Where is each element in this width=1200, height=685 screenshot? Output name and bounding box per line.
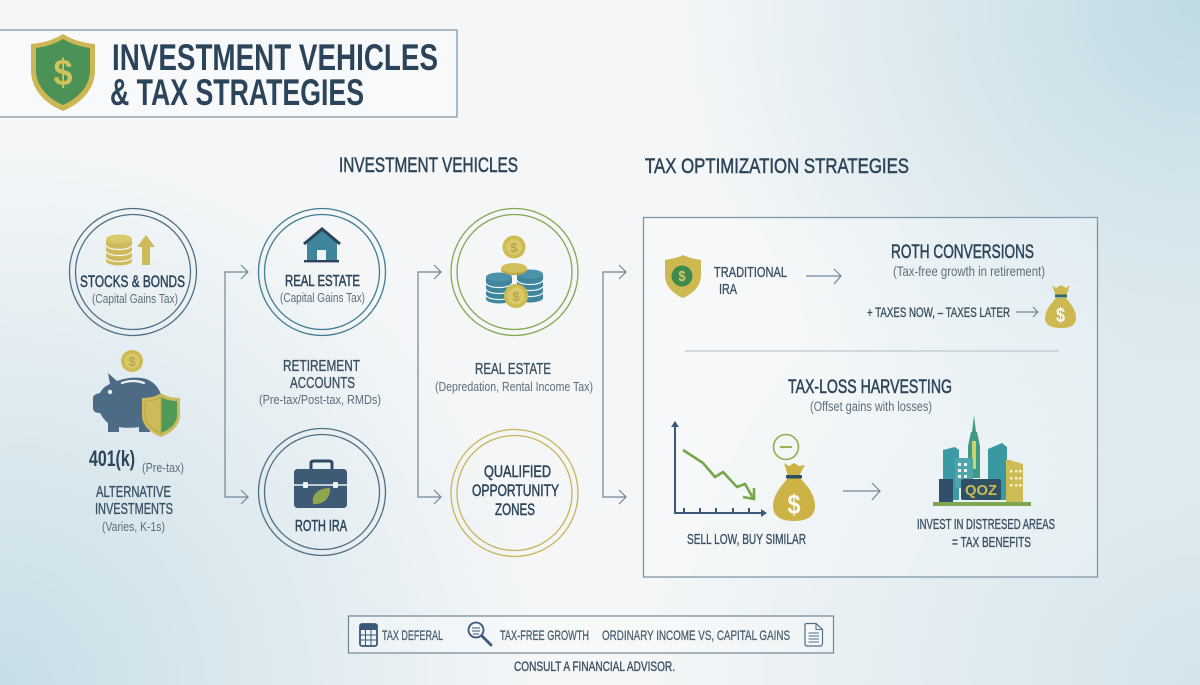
chart: falling line [671,421,767,517]
text: alternative investments: ALTERNATIVE [96,484,171,501]
icon: coin stack and arrow [106,234,155,266]
icon: calculator [360,624,377,646]
arrow: to money bag [1016,307,1038,317]
title banner [0,30,457,117]
icon: loss money bag [773,463,815,521]
text: tax-free growth: TAX-FREE GROWTH [500,627,589,643]
icon: piggy shield [142,393,180,437]
icon: document [805,624,822,646]
icon: coins and stacks [486,236,543,308]
heading: roth conversions: ROTH CONVERSIONS [891,242,1034,263]
panel: 401(k) piggy bank [89,350,184,475]
icon: coins and stacks: $ [512,289,520,304]
icon: loss money bag: $ [788,489,801,520]
icon: title shield [31,34,95,111]
arrow: bracket two [418,265,441,504]
footer bar [348,616,834,653]
panel: qualified opportunity zones: ZONES [495,500,535,519]
text: retirement accounts: ACCOUNTS [290,375,355,392]
icon: coin: $ [128,354,136,369]
icon: briefcase [294,461,347,508]
arrow: bracket one [225,265,248,504]
icon: magnifier [468,622,491,645]
panel: qualified opportunity zones [451,430,578,556]
text: real estate depreciation [435,361,593,394]
text: invest in distressed areas [917,517,1055,551]
arrow: bracket three [603,265,626,504]
panel: 401(k) piggy bank: (Pre-tax) [142,460,184,475]
text: invest in distressed areas: INVEST IN DISTRESED AREAS [917,517,1055,533]
text: real estate depreciation: (Depredation, Rental Income Tax) [435,379,593,394]
text: alternative investments: INVESTMENTS [95,501,173,518]
text: sell low buy similar: SELL LOW, BUY SIMILAR [687,531,806,548]
text: retirement accounts: RETIREMENT [283,358,360,375]
text: retirement accounts: (Pre-tax/Post-tax, RMDs) [259,392,381,407]
panel: 401(k) piggy bank: 401(k) [89,446,135,471]
icon: money bag [1045,285,1076,328]
icon: minus circle [774,434,798,460]
text: traditional ira [714,264,787,298]
text: alternative investments: (Varies, K-1s) [102,519,165,534]
text: real estate depreciation: REAL ESTATE [475,361,551,378]
text: alternative investments [95,484,173,534]
panel: stocks and bonds: (Capital Gains Tax) [92,291,178,306]
icon: traditional ira shield: $ [678,268,686,285]
heading: tax-loss harvesting: TAX-LOSS HARVESTING [788,377,952,398]
panel: roth ira: ROTH IRA [295,518,347,535]
panel: real estate capital gains [258,208,386,336]
icon: money bag: $ [1056,305,1065,327]
text: retirement accounts [259,358,381,407]
text: traditional ira: IRA [719,281,737,298]
icon: qoz city [933,415,1031,506]
text: invest in distressed areas: = TAX BENEFITS [952,535,1031,551]
icon: house [304,229,340,262]
text: consult a financial advisor: CONSULT A FINANCIAL ADVISOR. [514,658,675,674]
icon: title shield: $ [54,52,73,93]
panel: tax optimization strategies [644,218,1098,577]
panel: real estate capital gains: REAL ESTATE [285,273,360,290]
panel: real estate capital gains: (Capital Gains Tax) [280,290,365,305]
text: offset gains: (Offset gains with losses) [810,399,932,414]
text: traditional ira: TRADITIONAL [714,264,787,281]
panel: qualified opportunity zones: OPPORTUNITY [472,481,559,500]
text: roth note: (Tax-free growth in retirement) [893,263,1045,279]
arrow: harvesting to qoz [843,483,880,500]
icon: piggy bank [93,373,162,432]
text: tax deferral: TAX DEFERAL [382,627,443,643]
panel: real estate depreciation circle [451,208,578,336]
arrow: traditional to roth [806,269,841,284]
title banner: & TAX STRATEGIES [110,72,364,113]
title text: INVESTMENT VEHICLES [112,37,438,78]
panel: qualified opportunity zones: QUALIFIED [484,462,551,481]
heading: investment vehicles: INVESTMENT VEHICLES [339,154,518,177]
icon: traditional ira shield [665,255,701,298]
panel: stocks and bonds: STOCKS & BONDS [80,272,185,291]
icon: coins and stacks: $ [510,240,518,255]
panel: roth ira [258,428,386,556]
text: taxes now later: + TAXES NOW, – TAXES LATER [867,304,1010,320]
icon: qoz city: QOZ [965,482,997,499]
text: ordinary income vs capital gains: ORDINARY INCOME VS, CAPITAL GAINS [602,627,790,643]
panel: stocks and bonds [70,208,196,336]
heading: tax optimization strategies: TAX OPTIMIZATION STRATEGIES [645,155,909,178]
